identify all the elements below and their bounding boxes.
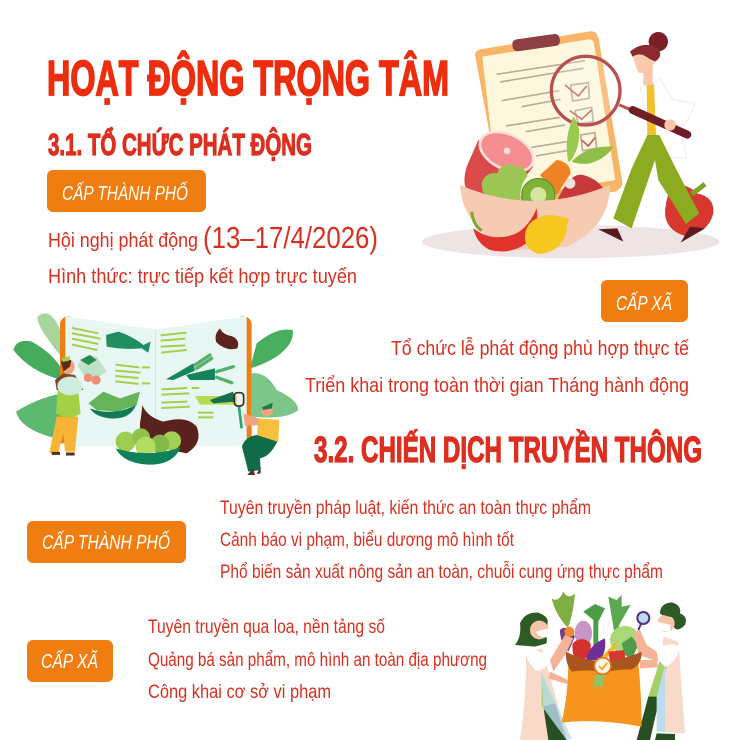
fruit bowl (116, 405, 199, 465)
button: cấp xã right (601, 280, 688, 322)
button: cấp xã right: CẤP XÃ (616, 291, 672, 315)
text block: thành phố communications: Tuyên truyền pháp luật, kiến thức an toàn thực phẩm (220, 498, 591, 519)
illustration: two inspectors with vegetable bag (515, 592, 686, 740)
title: HOẠT ĐỘNG TRỌNG TÂM (47, 51, 449, 106)
illustration: menu book with chefs (13, 313, 298, 475)
eggplant top (216, 328, 238, 349)
text block: xã communications (148, 617, 487, 703)
chili (473, 208, 537, 251)
text block: cấp xã: Tổ chức lễ phát động phù hợp thực tế (391, 337, 690, 360)
text block: thành phố communications (220, 498, 663, 583)
button: cấp thành phố 3.2: CẤP THÀNH PHỐ (42, 530, 170, 554)
lemon (525, 215, 569, 254)
red bell pepper (665, 183, 713, 236)
open book (60, 316, 252, 446)
bowl (460, 185, 610, 250)
text block: xã communications: Công khai cơ sở vi phạm (148, 682, 331, 703)
text block: hội nghị: Hội nghị phát động (48, 229, 198, 252)
text block: cấp xã: Triển khai trong toàn thời gian Tháng hành động (305, 374, 689, 397)
illustration: inspector with food bowl (422, 31, 719, 258)
text block: thành phố communications: Cảnh báo vi phạm, biểu dương mô hình tốt (220, 530, 515, 551)
vegetables (552, 592, 640, 662)
heading: 3.1: 3.1. TỔ CHỨC PHÁT ĐỘNG (48, 126, 312, 162)
small vegetables (77, 355, 107, 377)
text block: hội nghị: (13–17/4/2026) (203, 220, 378, 255)
magnifier (551, 56, 687, 135)
person left (515, 613, 573, 740)
background leaves (13, 313, 298, 437)
button: cấp thành phố 3.1 (47, 170, 206, 212)
leafy vegetables and carrot (482, 117, 613, 212)
woman (598, 32, 705, 243)
orange bag (562, 652, 642, 727)
text block: hội nghị (48, 220, 378, 288)
clipboard (475, 31, 622, 207)
button: cấp xã bottom (27, 640, 113, 682)
chef right (234, 393, 279, 475)
text block: hội nghị: Hình thức: trực tiếp kết hợp trực tuyến (48, 265, 357, 288)
meat (464, 124, 605, 205)
button: cấp thành phố 3.1: CẤP THÀNH PHỐ (62, 181, 188, 205)
text block: cấp xã (305, 337, 690, 397)
lettuce bowl (88, 392, 140, 412)
button: cấp thành phố 3.2 (27, 521, 186, 563)
ground shadow (422, 225, 719, 258)
person right (634, 602, 686, 740)
button: cấp xã bottom: CẤP XÃ (41, 649, 98, 673)
text block: xã communications: Tuyên truyền qua loa, nền tảng số (148, 617, 385, 638)
text block: xã communications: Quảng bá sản phẩm, mô hình an toàn địa phương (148, 650, 487, 671)
chef left (49, 356, 83, 454)
carrots (166, 363, 215, 380)
fish (106, 332, 151, 353)
